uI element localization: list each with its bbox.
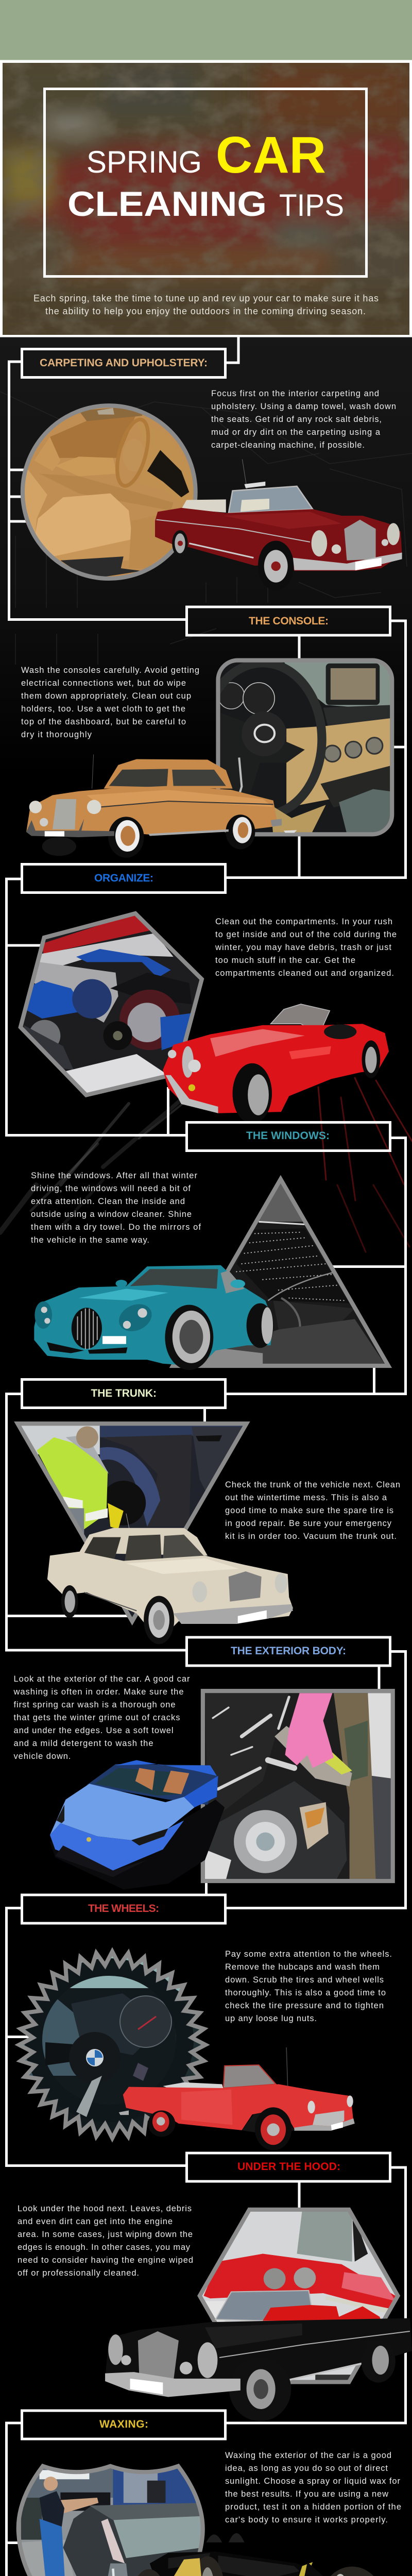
text block xyxy=(225,2451,401,2524)
heading: ORGANIZE: xyxy=(94,872,153,884)
text block: outside using a window cleaner. Shine xyxy=(31,1210,192,1219)
heading: THE WHEELS: xyxy=(88,1903,159,1914)
heading xyxy=(186,1637,390,1666)
car: orange coupe xyxy=(26,754,297,858)
photo: car wash square xyxy=(202,1689,394,1881)
title: CAR xyxy=(216,126,326,184)
text block: washing is often in order. Make sure the xyxy=(13,1687,183,1697)
text block: the best results. If you are using a new xyxy=(225,2489,388,2499)
car: red convertible xyxy=(119,2047,355,2150)
heading: UNDER THE HOOD: xyxy=(237,2161,340,2173)
intro text: Each spring, take the time to tune up and rev up your car to make sure it has xyxy=(33,293,379,303)
text block: Waxing the exterior of the car is a good xyxy=(225,2451,391,2460)
connector lines xyxy=(6,2423,185,2576)
text block: check the tire pressure and to tighten xyxy=(225,2001,384,2010)
heading xyxy=(22,865,226,892)
text block: upholstery. Using a damp towel, wash down xyxy=(211,402,396,411)
connector lines xyxy=(9,335,238,619)
car: vintage black racer xyxy=(133,2533,379,2576)
text block xyxy=(18,2204,193,2278)
text block: good time to make sure the spare tire is xyxy=(225,1506,393,1515)
text block: Focus first on the interior carpeting and xyxy=(211,389,379,398)
title frame xyxy=(44,89,367,276)
top green band xyxy=(0,0,412,60)
car: blue convertible supercar xyxy=(50,1760,225,1889)
text block: winter, you may have debris, trash or just xyxy=(215,943,391,952)
text block: car's body to ensure it works properly. xyxy=(225,2515,388,2524)
connector lines xyxy=(206,1652,406,1908)
panel: the trunk xyxy=(6,1380,400,1650)
heading xyxy=(22,1380,226,1408)
text block: need to consider having the engine wiped xyxy=(18,2256,193,2265)
heading: THE EXTERIOR BODY: xyxy=(231,1645,346,1657)
car: black convertible xyxy=(105,2291,412,2421)
panel: the wheels xyxy=(6,1895,392,2166)
text block: extra attention. Clean the inside and xyxy=(31,1197,185,1206)
panel: the console xyxy=(21,607,406,878)
photo: engine hexagon xyxy=(16,909,205,1099)
photo: window droplets triangle xyxy=(168,1175,394,1369)
text block xyxy=(13,1674,190,1761)
text block: Remove the hubcaps and wash them xyxy=(225,1962,380,1972)
text block: to get inside and out of the cold during the xyxy=(215,930,397,939)
text block: Look under the hood next. Leaves, debris xyxy=(18,2204,192,2213)
title: CLEANING xyxy=(67,184,267,224)
text block: kit is in order too. Vacuum the trunk out. xyxy=(225,1532,397,1541)
heading xyxy=(22,349,226,377)
text block: dry it thoroughly xyxy=(21,730,92,739)
car: cream coupe xyxy=(47,1514,293,1644)
title: SPRING xyxy=(87,145,202,179)
textured dark background of first sections xyxy=(0,337,412,775)
panel: the exterior body xyxy=(13,1637,406,1908)
text block: Clean out the compartments. In your rush xyxy=(215,917,392,926)
connector lines xyxy=(6,1908,185,2166)
panel: the windows xyxy=(31,1122,406,1394)
text block: too much stuff in the car. Get the xyxy=(215,956,355,965)
car: teal sports car xyxy=(34,1265,274,1370)
car: red roadster xyxy=(163,1004,389,1124)
intro text xyxy=(33,293,379,316)
text block: that gets the winter grime out of cracks xyxy=(13,1713,180,1722)
title xyxy=(67,126,344,224)
text block: them with a dry towel. Do the mirrors of xyxy=(31,1223,201,1232)
text block: first spring car wash is a thorough one xyxy=(13,1700,175,1709)
text block: down. Scrub the tires and wheel wells xyxy=(225,1975,384,1985)
text block xyxy=(211,389,396,450)
text block: thoroughly. This is also a good time to xyxy=(225,1988,386,1997)
text block: product, test it on a hidden portion of the xyxy=(225,2502,401,2512)
text block: up any loose lug nuts. xyxy=(225,2014,317,2023)
text block: Look at the exterior of the car. A good car xyxy=(13,1674,190,1684)
heading xyxy=(186,607,390,635)
text block xyxy=(225,1950,392,2023)
text block: in good repair. Be sure your emergency xyxy=(225,1519,392,1528)
text block: Shine the windows. After all that winter xyxy=(31,1171,198,1180)
text block: vehicle down. xyxy=(13,1752,71,1761)
text block: off or professionally cleaned. xyxy=(18,2268,139,2278)
connector lines xyxy=(227,1138,406,1394)
photo: car interior circle xyxy=(19,400,202,584)
text block: top of the dashboard, but be careful to xyxy=(21,717,186,726)
text block: compartments cleaned out and organized. xyxy=(215,969,394,978)
text block: and even dirt can get into the engine xyxy=(18,2217,173,2226)
connector lines xyxy=(227,2167,406,2423)
text block xyxy=(225,1480,400,1541)
header panel xyxy=(3,63,412,335)
text block: the vehicle in the same way. xyxy=(31,1235,149,1245)
heading xyxy=(22,2411,226,2439)
text block: Check the trunk of the vehicle next. Clean xyxy=(225,1480,400,1489)
heading: THE CONSOLE: xyxy=(249,615,329,627)
text block: sunlight. Choose a spray or liquid wax for xyxy=(225,2477,401,2486)
photo: steering wheel starburst xyxy=(14,1947,210,2143)
text block: out the wintertime mess. This is also a xyxy=(225,1493,387,1502)
text block xyxy=(31,1171,201,1245)
title: TIPS xyxy=(279,188,344,223)
text block: edges is enough. In other cases, you may xyxy=(18,2243,191,2252)
text block: mud or dry dirt on the carpeting using a xyxy=(211,428,381,437)
heading: THE WINDOWS: xyxy=(246,1130,330,1142)
heading xyxy=(186,1122,390,1151)
text block: them down appropriately. Clean out cup xyxy=(21,691,191,701)
panel: carpeting and upholstery xyxy=(9,335,402,619)
intro text: the ability to help you enjoy the outdoors in the coming driving season. xyxy=(45,306,366,316)
text block: Wash the consoles carefully. Avoid getting xyxy=(21,666,199,675)
photo: car wash shield xyxy=(16,2464,208,2576)
text block: idea, as long as you do so out of direct xyxy=(225,2464,388,2473)
text block: holders, too. Use a wet cloth to get the xyxy=(21,704,185,714)
car: red convertible xyxy=(155,459,402,590)
panel: under the hood xyxy=(18,2153,412,2423)
text block: area. In some cases, just wiping down the xyxy=(18,2230,193,2239)
text block: Pay some extra attention to the wheels. xyxy=(225,1950,392,1959)
night road background behind organize and windows xyxy=(0,1078,412,1252)
heading xyxy=(22,1895,226,1923)
text block xyxy=(215,917,397,978)
text block xyxy=(21,666,199,739)
photo: red car hexagon xyxy=(197,2208,402,2386)
text block: and a mild detergent to wash the xyxy=(13,1739,153,1748)
heading: CARPETING AND UPHOLSTERY: xyxy=(40,357,208,369)
panel: organize xyxy=(6,865,397,1136)
heading: THE TRUNK: xyxy=(91,1387,157,1399)
photo: spare tire inverted triangle xyxy=(13,1421,250,1626)
connector lines xyxy=(227,621,406,878)
text block: electrical connections wet, but do wipe xyxy=(21,679,186,688)
connector lines xyxy=(6,879,185,1136)
heading xyxy=(186,2153,390,2181)
text block: and under the edges. Use a soft towel xyxy=(13,1726,173,1735)
text block: driving, the windows will need a bit of xyxy=(31,1184,191,1193)
panel: waxing xyxy=(6,2411,401,2576)
heading: WAXING: xyxy=(99,2418,148,2430)
text block: the seats. Get rid of any rock salt debris, xyxy=(211,415,382,424)
text block: carpet-cleaning machine, if possible. xyxy=(211,440,365,450)
photo: dashboard rounded rectangle xyxy=(203,658,394,839)
connector lines xyxy=(6,1394,205,1650)
